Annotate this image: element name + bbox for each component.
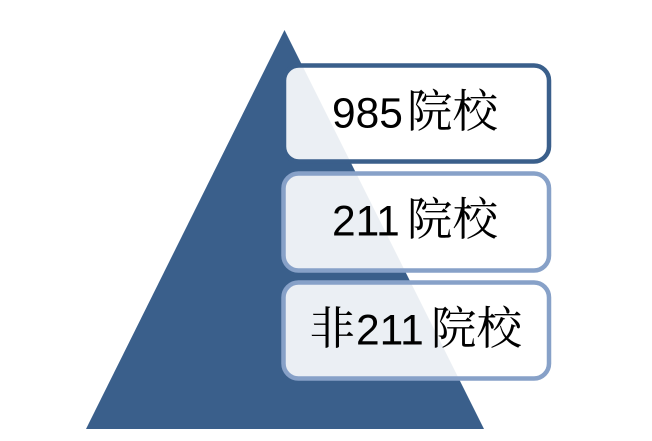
tier box: 985: 985 xyxy=(332,90,403,138)
tier box: non-211 xyxy=(284,282,549,378)
tier box: 211: 211 xyxy=(332,198,400,246)
tier box: 985: 院校 xyxy=(407,86,500,137)
tier box: 985 xyxy=(284,66,549,162)
tier box: non-211: 非 xyxy=(310,303,355,354)
tier box: non-211: 211 xyxy=(356,308,424,354)
tier box: non-211: 院校 xyxy=(431,303,524,354)
tier box: 211: 院校 xyxy=(407,194,500,245)
tier box: 211 xyxy=(284,174,549,270)
pyramid triangle xyxy=(86,30,484,429)
